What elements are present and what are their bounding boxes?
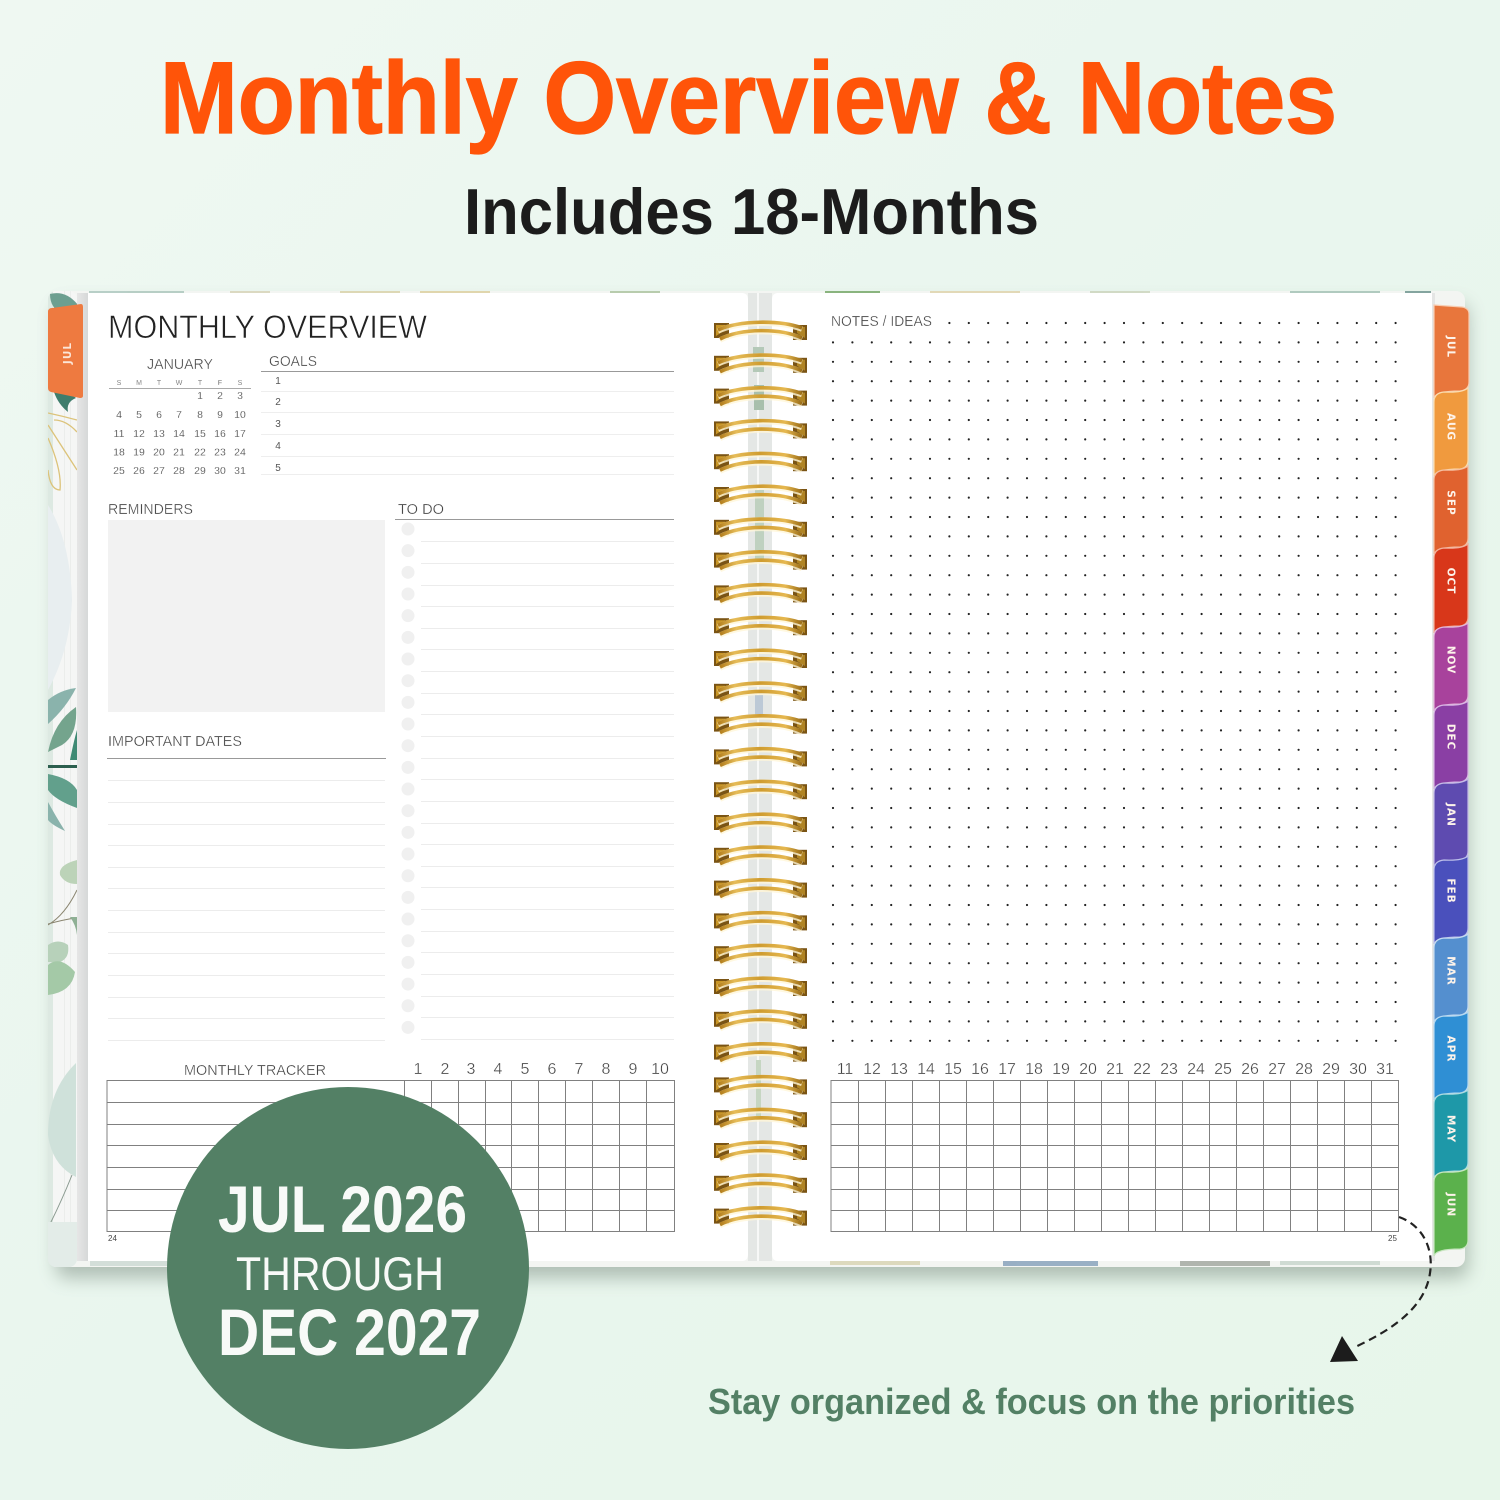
date badge (167, 1087, 529, 1449)
tab APR (1434, 1012, 1468, 1100)
dot grid (833, 323, 1396, 1041)
tab JAN (1434, 779, 1468, 867)
monthly tracker right: 28 (1295, 1061, 1313, 1078)
mini calendar: 1 (197, 390, 203, 402)
monthly tracker right: 23 (1160, 1061, 1178, 1078)
left JUL tab (48, 304, 83, 398)
monthly tracker right: 22 (1133, 1061, 1151, 1078)
to do section (395, 502, 674, 1040)
monthly tracker left: 10 (651, 1061, 669, 1078)
mini calendar: S (238, 380, 243, 387)
heading: monthly overview: MONTHLY OVERVIEW (108, 309, 428, 345)
mini calendar: 30 (214, 465, 226, 477)
monthly tracker left: 4 (494, 1061, 503, 1078)
monthly tracker left: 6 (548, 1061, 557, 1078)
mini calendar: 17 (234, 428, 246, 440)
mini calendar (109, 357, 251, 477)
to do section: TO DO (398, 502, 444, 518)
reminders section (108, 502, 385, 712)
mini calendar: 9 (217, 409, 223, 421)
floral cover (48, 291, 1465, 1267)
monthly tracker left: 2 (441, 1061, 450, 1078)
mini calendar: 2 (217, 390, 223, 402)
spine gutter (77, 293, 88, 1261)
mini calendar: 22 (194, 446, 206, 458)
mini calendar: 18 (113, 446, 125, 458)
important dates section (107, 734, 386, 1040)
mini calendar: 3 (237, 390, 243, 402)
mini calendar: F (218, 380, 222, 387)
tab MAY (1434, 1090, 1468, 1178)
monthly tracker right: 19 (1052, 1061, 1070, 1078)
mini calendar: 29 (194, 465, 206, 477)
mini calendar: 16 (214, 428, 226, 440)
monthly tracker right: 21 (1106, 1061, 1124, 1078)
goals section: 1 (275, 376, 281, 387)
tab MAR (1434, 934, 1468, 1022)
mini calendar: M (136, 380, 142, 387)
monthly tracker left (107, 1061, 674, 1243)
caption: Stay organized & focus on the priorities (708, 1381, 1355, 1422)
mini calendar: T (198, 380, 203, 387)
mini calendar: 12 (133, 428, 145, 440)
monthly tracker right: 29 (1322, 1061, 1340, 1078)
monthly tracker left: 24 (108, 1234, 117, 1243)
monthly tracker right: 25 (1214, 1061, 1232, 1078)
mini calendar: 21 (173, 446, 185, 458)
tab FEB: FEB (1444, 878, 1456, 904)
monthly tracker left: 9 (629, 1061, 638, 1078)
tab MAY: MAY (1444, 1115, 1456, 1143)
important dates section: IMPORTANT DATES (108, 734, 242, 750)
monthly tracker left: 3 (467, 1061, 476, 1078)
monthly tracker right: 31 (1376, 1061, 1394, 1078)
tab JUL (1434, 305, 1469, 398)
mini calendar: 25 (113, 465, 125, 477)
mini calendar: JANUARY (147, 357, 213, 373)
notes heading: NOTES / IDEAS (831, 314, 932, 330)
mini calendar: 27 (153, 465, 165, 477)
mini calendar: T (157, 380, 162, 387)
mini calendar: 4 (116, 409, 122, 421)
monthly tracker right: 15 (944, 1061, 962, 1078)
monthly tracker left: 1 (414, 1061, 423, 1078)
tab SEP: SEP (1444, 490, 1456, 516)
left page (88, 293, 748, 1261)
left cover spine with leaves (48, 291, 78, 1267)
monthly tracker right: 27 (1268, 1061, 1286, 1078)
cover shadow (56, 304, 1468, 1278)
monthly tracker left: 8 (602, 1061, 611, 1078)
dashed arrow (1330, 1217, 1431, 1362)
tab FEB (1434, 856, 1468, 944)
reminders section: REMINDERS (108, 502, 193, 518)
monthly tracker right: 26 (1241, 1061, 1259, 1078)
monthly tracker right: 17 (998, 1061, 1016, 1078)
mini calendar: 31 (234, 465, 246, 477)
tab AUG (1434, 388, 1468, 476)
monthly tracker right: 11 (837, 1061, 853, 1078)
centre spine (748, 293, 772, 1261)
mini calendar: 6 (156, 409, 162, 421)
monthly tracker right (831, 1061, 1398, 1243)
date badge: DEC 2027 (218, 1295, 481, 1369)
goals section: 2 (275, 397, 281, 408)
title: Monthly Overview & Notes (160, 41, 1337, 155)
mini calendar: 10 (234, 409, 246, 421)
monthly tracker right: 16 (971, 1061, 989, 1078)
monthly tracker right: 13 (890, 1061, 908, 1078)
subtitle: Includes 18-Months (464, 175, 1039, 248)
goals section: 3 (275, 419, 281, 430)
tab SEP (1434, 466, 1468, 554)
mini calendar: 15 (194, 428, 206, 440)
tab OCT (1434, 544, 1468, 633)
mini calendar: 7 (176, 409, 182, 421)
goals section: 5 (275, 463, 281, 474)
monthly tracker right: 24 (1187, 1061, 1205, 1078)
monthly tracker right: 12 (863, 1061, 881, 1078)
tab NOV: NOV (1444, 646, 1456, 674)
mini calendar: 11 (114, 428, 125, 440)
tab JUL: JUL (1444, 335, 1456, 358)
tab OCT: OCT (1444, 568, 1456, 594)
monthly tracker right: 18 (1025, 1061, 1043, 1078)
mini calendar: 28 (173, 465, 185, 477)
goals section: GOALS (269, 354, 317, 370)
goals section (261, 354, 674, 474)
tab NOV (1434, 623, 1468, 711)
mini calendar: 8 (197, 409, 203, 421)
month tabs (1434, 305, 1469, 1256)
tab JAN: JAN (1444, 802, 1456, 827)
mini calendar: 26 (133, 465, 145, 477)
mini calendar: S (117, 380, 122, 387)
tab APR: APR (1444, 1036, 1456, 1062)
monthly tracker left: 5 (521, 1061, 530, 1078)
date badge: THROUGH (236, 1247, 444, 1300)
spiral binding (714, 322, 807, 1226)
monthly tracker right: 20 (1079, 1061, 1097, 1078)
monthly tracker left: MONTHLY TRACKER (184, 1063, 326, 1079)
left JUL tab: JUL (62, 342, 74, 365)
mini calendar: 24 (234, 446, 246, 458)
cover top edge foliage (89, 291, 1431, 294)
mini calendar: 19 (133, 446, 145, 458)
mini calendar: 20 (153, 446, 165, 458)
open planner (48, 291, 1469, 1278)
mini calendar: 14 (173, 428, 185, 440)
tab JUN (1434, 1168, 1468, 1256)
monthly tracker left: 7 (575, 1061, 584, 1078)
tab AUG: AUG (1444, 413, 1456, 441)
right page (772, 293, 1432, 1261)
date badge: JUL 2026 (218, 1172, 467, 1246)
mini calendar: 23 (214, 446, 226, 458)
mini calendar: 13 (153, 428, 165, 440)
tab JUN: JUN (1444, 1192, 1456, 1217)
mini calendar: 5 (136, 409, 142, 421)
goals section: 4 (275, 441, 281, 452)
tab DEC (1434, 701, 1468, 789)
cover bottom edge foliage (90, 1261, 1380, 1266)
tab MAR: MAR (1444, 956, 1456, 986)
tab DEC: DEC (1444, 724, 1456, 750)
mini calendar: W (176, 380, 183, 387)
monthly tracker right: 14 (917, 1061, 935, 1078)
monthly tracker right: 30 (1349, 1061, 1367, 1078)
monthly tracker right: 25 (1388, 1234, 1397, 1243)
